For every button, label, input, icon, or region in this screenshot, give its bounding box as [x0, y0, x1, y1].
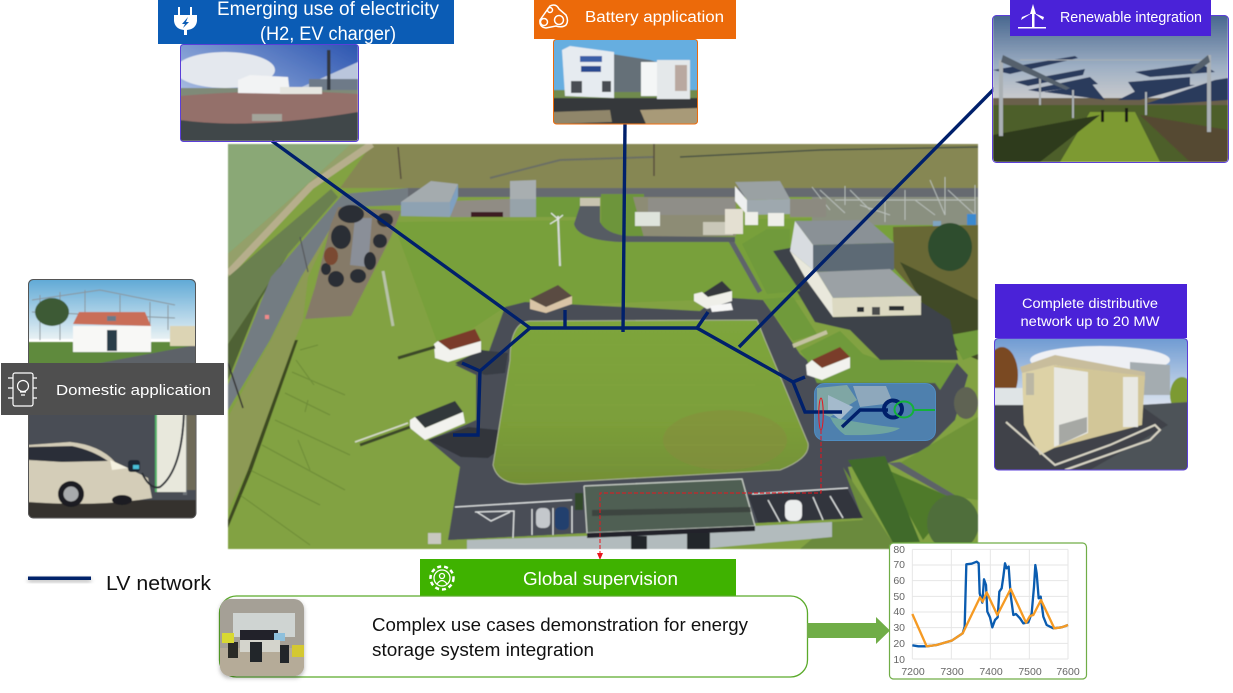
icon: light bulb circuit: [8, 373, 37, 406]
panel: domestic application: [1, 279, 224, 518]
icon: gear with user: [430, 566, 454, 590]
heading text: Battery application: [585, 9, 724, 26]
label bar: [534, 0, 736, 39]
panel: complete distributive network: [986, 284, 1194, 470]
photo: supervision control room: [220, 599, 304, 676]
x axis labels: [901, 666, 1080, 678]
photo: white house and substation: [28, 279, 196, 369]
legend: LV network: [28, 573, 212, 595]
y axis labels: 70: [893, 559, 905, 571]
fields beyond the site: [228, 144, 351, 254]
x axis labels: 7200: [901, 666, 925, 678]
LV network lines: [272, 88, 995, 435]
house shadow walls: [398, 347, 435, 358]
x axis labels: 7300: [940, 666, 964, 678]
y axis labels: 10: [893, 654, 905, 666]
icon: wind turbine: [1018, 4, 1046, 28]
panel: complete distributive network: network up to 20 MW: [1020, 314, 1160, 329]
heading text: Complete distributive: [1022, 296, 1158, 311]
y axis labels: 80: [893, 544, 905, 556]
shadow patches: [428, 427, 498, 458]
icon: belt and gears: [540, 5, 568, 28]
right side lawns: [774, 246, 800, 292]
x axis labels: 7400: [979, 666, 1003, 678]
central lawn: [493, 320, 808, 484]
aerial photo of the test site: [228, 144, 979, 551]
text block: Complex use cases demonstration for energy: [372, 615, 748, 635]
houses: [530, 285, 572, 307]
label bar: [1010, 0, 1211, 36]
supervision building: [467, 522, 832, 549]
heading text: Renewable integration: [1060, 10, 1202, 26]
icon: electric plug: [174, 7, 197, 35]
arrow to chart: [807, 617, 890, 644]
label bar: [158, 0, 454, 44]
label bar: [1, 363, 224, 415]
storage yard with cable reels: [305, 207, 401, 319]
panel: complex use cases: [220, 596, 808, 677]
label bar: [995, 284, 1187, 338]
blue overlay: storage substation highlight: [814, 384, 936, 440]
green feeder connection: [894, 402, 935, 418]
panel: complex use cases: storage system integration: [372, 640, 594, 660]
y axis labels: 60: [893, 575, 905, 587]
x axis labels: 7500: [1018, 666, 1042, 678]
hedge along fence: [228, 224, 333, 510]
blue measured series: [912, 562, 1068, 646]
photo: electric vehicle charging: [28, 410, 196, 518]
y axis labels: 30: [893, 622, 905, 634]
scrub and tree right of laboratory: [892, 224, 978, 300]
grey sheds and yards: [451, 199, 510, 217]
panel: emerging use of electricity: (H2, EV charger): [260, 24, 396, 45]
large laboratory building: [795, 220, 894, 245]
photo: battery containers: [553, 39, 698, 124]
substation: [812, 197, 978, 225]
masts and wind turbine: [558, 216, 560, 266]
photo: agrivoltaic solar field: [993, 15, 1228, 162]
photo: secondary substation: [986, 338, 1194, 470]
panel: renewable integration: [992, 0, 1228, 162]
heading: global supervision: [420, 559, 736, 597]
photo: hydrogen and EV site: [175, 44, 358, 141]
heading text: Domestic application: [56, 382, 211, 399]
line chart: [890, 543, 1086, 679]
y axis labels: [893, 544, 905, 666]
y axis labels: 50: [893, 591, 905, 603]
y axis labels: 20: [893, 638, 905, 650]
perimeter road: [228, 188, 408, 410]
orange simulated series: [912, 589, 1068, 646]
heading: global supervision: Global supervision: [523, 569, 678, 589]
parking behind laboratory: [773, 247, 958, 360]
storage connection circle: [884, 400, 902, 418]
chart gridlines: [912, 549, 1068, 659]
y axis labels: 40: [893, 606, 905, 618]
x axis labels: 7600: [1056, 666, 1080, 678]
panel: emerging use of electricity: [158, 0, 454, 142]
panel: battery application: [534, 0, 736, 124]
red supervision link: [597, 398, 823, 560]
marker dot: [265, 315, 269, 319]
fence shadows on left lawn: [240, 345, 350, 545]
ring road: [428, 297, 968, 540]
legend: LV network: LV network: [106, 573, 212, 595]
parking areas: [448, 498, 587, 540]
